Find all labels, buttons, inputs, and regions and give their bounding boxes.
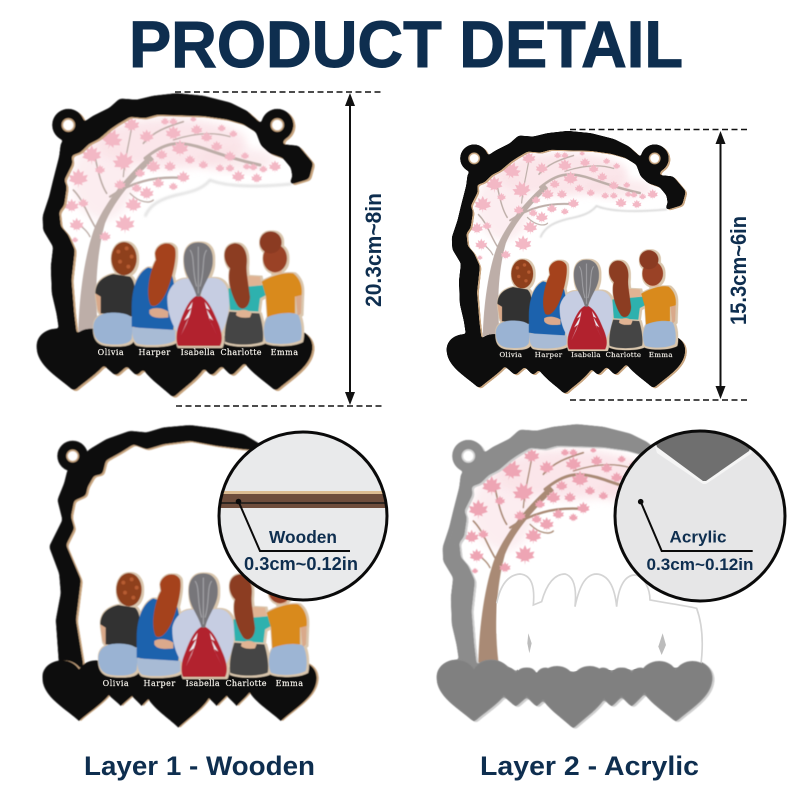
name labels, large: Olivia bbox=[98, 348, 124, 357]
acrylic figure cut-out silhouettes bbox=[497, 574, 702, 673]
product artwork, large bbox=[37, 94, 314, 398]
wooden layer artwork bbox=[42, 426, 319, 728]
dimension: 20.3cm~8in: 20.3cm~8in bbox=[361, 193, 386, 307]
name labels, wooden: Olivia bbox=[103, 679, 129, 688]
name labels, small bbox=[499, 351, 673, 359]
panel: layer 1 wooden bbox=[42, 426, 395, 728]
name labels, wooden: Charlotte bbox=[225, 679, 267, 688]
name labels, wooden: Emma bbox=[276, 679, 303, 688]
dimension: 20.3cm~8in bbox=[175, 92, 386, 406]
panel: layer 2 acrylic bbox=[437, 425, 785, 729]
acrylic layer artwork bbox=[437, 425, 714, 729]
panel: full product small bbox=[447, 130, 751, 400]
callout: wooden thickness magnifier: 0.3cm~0.12in bbox=[244, 554, 358, 574]
caption: layer 1: Layer 1 - Wooden bbox=[84, 751, 315, 781]
product artwork, small bbox=[447, 132, 687, 394]
name labels, wooden: Harper bbox=[143, 679, 175, 688]
caption: layer 2: Layer 2 - Acrylic bbox=[480, 751, 699, 781]
name labels, small: Charlotte bbox=[606, 351, 641, 359]
name labels, wooden: Isabella bbox=[186, 679, 220, 688]
name labels, small: Isabella bbox=[571, 351, 601, 359]
name labels, small: Harper bbox=[535, 351, 563, 359]
name labels, large: Charlotte bbox=[220, 348, 262, 357]
callout: wooden thickness magnifier: Wooden bbox=[269, 527, 337, 547]
callout: acrylic thickness magnifier: Acrylic bbox=[670, 528, 726, 546]
name labels, large: Harper bbox=[138, 348, 170, 357]
dimension: 15.3cm~6in bbox=[570, 130, 751, 400]
name labels, large bbox=[98, 348, 298, 357]
title: PRODUCT DETAIL bbox=[129, 7, 683, 81]
name labels, small: Olivia bbox=[499, 351, 522, 359]
name labels, wooden bbox=[103, 679, 303, 688]
panel: full product large bbox=[37, 92, 386, 406]
name labels, large: Isabella bbox=[181, 348, 215, 357]
callout: acrylic thickness magnifier: 0.3cm~0.12in bbox=[646, 555, 754, 574]
name labels, large: Emma bbox=[271, 348, 298, 357]
callout: wooden thickness magnifier bbox=[215, 432, 395, 600]
callout: acrylic thickness magnifier bbox=[615, 425, 785, 601]
acrylic hearts overlay bbox=[437, 660, 712, 728]
dimension: 15.3cm~6in: 15.3cm~6in bbox=[726, 216, 751, 325]
name labels, small: Emma bbox=[649, 351, 673, 359]
